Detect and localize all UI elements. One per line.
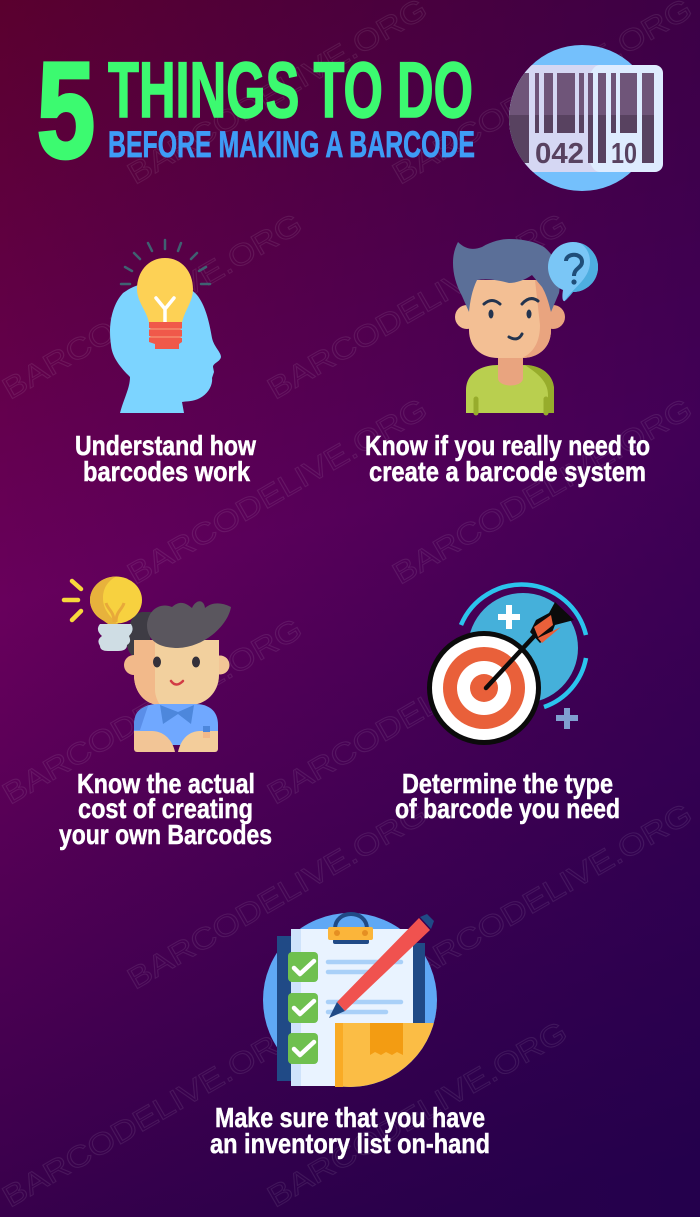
label: barcodes work	[83, 456, 250, 487]
panel: inventory list	[210, 913, 490, 1159]
text: BARCODELIVE.ORG	[262, 612, 573, 811]
label	[75, 430, 256, 487]
icon: man with question bubble	[453, 239, 598, 413]
panel: know the actual cost	[59, 576, 272, 850]
text: BARCODELIVE.ORG	[0, 1015, 308, 1214]
label: cost of creating	[78, 793, 253, 824]
barcode digits left: 042	[535, 138, 584, 170]
text: BARCODELIVE.ORG	[262, 207, 573, 406]
icon: head with light bulb	[110, 240, 221, 413]
label	[365, 430, 650, 487]
icon: boy with idea bulb	[64, 576, 231, 752]
text: BARCODELIVE.ORG	[122, 392, 433, 591]
text: BARCODELIVE.ORG	[387, 392, 698, 591]
label: Understand how	[75, 430, 256, 461]
label	[210, 1102, 490, 1159]
title	[37, 34, 475, 186]
barcode digits right: 10	[611, 138, 637, 170]
checklist	[288, 952, 401, 1064]
title numeral: 5	[37, 34, 95, 186]
pencil	[329, 914, 434, 1018]
label: an inventory list on-hand	[210, 1128, 490, 1159]
box	[335, 1003, 437, 1087]
label	[395, 768, 620, 824]
text: BARCODELIVE.ORG	[387, 797, 698, 996]
text: BARCODELIVE.ORG	[262, 1015, 573, 1214]
label: Know the actual	[77, 768, 255, 799]
icon: clipboard with checklist, pencil and box	[263, 913, 437, 1087]
speech bubble with question mark	[548, 242, 598, 301]
text: BARCODELIVE.ORG	[122, 0, 433, 191]
clip	[328, 914, 373, 944]
label	[59, 768, 272, 850]
text: BARCODELIVE.ORG	[0, 207, 308, 406]
label: Make sure that you have	[215, 1102, 485, 1133]
icon: barcode	[500, 45, 663, 191]
text: BARCODELIVE.ORG	[122, 797, 433, 996]
label: of barcode you need	[395, 793, 620, 824]
title main line: THINGS TO DO	[108, 45, 473, 134]
label: create a barcode system	[369, 456, 646, 487]
text: BARCODELIVE.ORG	[387, 0, 698, 191]
label: Determine the type	[402, 768, 613, 799]
label: your own Barcodes	[59, 819, 272, 850]
text: BARCODELIVE.ORG	[0, 612, 308, 811]
panel: know if you need a barcode system	[365, 239, 650, 487]
panel: determine the barcode type	[395, 585, 620, 824]
icon: target with arrow	[427, 585, 586, 745]
title subtitle: BEFORE MAKING A BARCODE	[108, 124, 475, 165]
panel: understand how barcodes work	[75, 240, 256, 487]
